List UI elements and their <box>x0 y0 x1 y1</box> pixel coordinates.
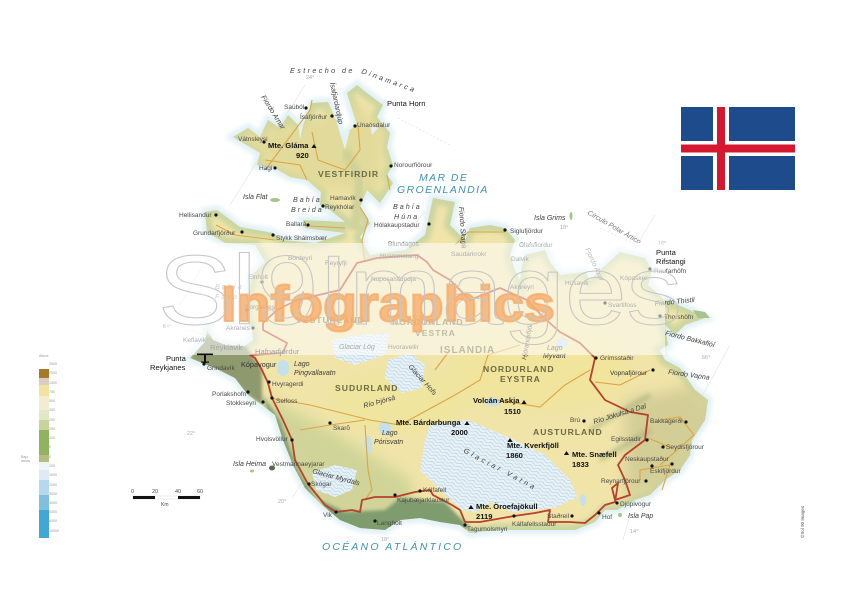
elevation legend: 200 <box>49 427 55 431</box>
place labels: Blundagos <box>388 241 419 248</box>
water and feature labels: Fiordo Arnar <box>259 94 286 131</box>
region labels: AUSTURLAND <box>533 427 603 437</box>
elevation legend: altura <box>21 459 30 463</box>
town dots <box>202 106 688 527</box>
place labels: Borgarnes <box>245 304 276 311</box>
elevation legend: 0 <box>49 455 51 459</box>
water and feature labels: Lago <box>547 345 563 352</box>
elevation legend: 1000 <box>49 473 57 477</box>
graticule degree labels <box>163 75 710 543</box>
mountain labels: 1860 <box>506 451 523 460</box>
scale bar <box>131 489 203 508</box>
place labels: Kálfafell <box>423 487 447 494</box>
place labels: Hof <box>602 514 612 521</box>
place labels: Brú <box>570 417 580 424</box>
place labels: Kópasker <box>620 275 648 282</box>
mountain labels: 2000 <box>451 428 468 437</box>
place labels: Norourfiörour <box>394 162 433 169</box>
place labels: Olafsfiordur <box>519 242 553 249</box>
airplane icon <box>197 354 213 363</box>
elevation legend <box>21 354 59 538</box>
region labels: NORDURLAND <box>483 364 555 374</box>
land base <box>190 85 708 533</box>
sea glow around the coast <box>190 85 708 533</box>
water and feature labels: Ísafjardardjúp <box>328 82 346 125</box>
graticule degree labels: 66° <box>702 355 710 361</box>
place labels: Skógar <box>311 481 332 488</box>
graticule degree labels: 64° <box>163 324 171 330</box>
coastal point labels: Punta <box>166 354 187 363</box>
mountain labels: 920 <box>296 151 309 160</box>
elevation legend: 2000 <box>49 371 57 375</box>
place labels: Hellisandur <box>179 212 212 219</box>
elevation legend: 200 <box>49 418 55 422</box>
place labels: Kópavogur <box>241 360 277 369</box>
place labels: Akureyri <box>510 284 534 291</box>
place labels: Unaósdalur <box>357 122 391 129</box>
coastal point labels: Punta Horn <box>387 99 425 108</box>
place labels: Stokkseyri <box>226 400 256 407</box>
elevation legend: 500 <box>49 399 55 403</box>
place labels: Nuposalsfundja <box>371 276 416 283</box>
watermark: outlined text: Sl9Images <box>158 235 682 345</box>
water and feature labels: Isla Grims <box>534 215 566 222</box>
water and feature labels: Glaciar Lög <box>339 344 375 351</box>
credit: ©Sol 90 Images <box>799 505 805 538</box>
water and feature labels: Isla Pap <box>628 513 653 520</box>
place labels: Thorshöfn <box>664 314 694 321</box>
place labels: Ísafjörður <box>300 112 328 121</box>
graticule degree labels: 24° <box>306 75 314 81</box>
water and feature labels: Glaciar Hofs <box>407 364 438 397</box>
elevation legend: 2500 <box>49 362 57 366</box>
place labels: Seydisfjörour <box>666 444 705 451</box>
place labels: Reyryfjl <box>325 260 347 267</box>
mountain labels: Volcán Askja <box>473 396 520 405</box>
elevation legend: 5000 <box>49 510 57 514</box>
glacier: Hofs <box>385 353 425 393</box>
Punta Rifstangi label: Punta <box>656 248 676 257</box>
water and feature labels: Pingvallavatn <box>294 370 336 377</box>
mountain labels: 2119 <box>476 512 492 521</box>
elevation legend: 4000 <box>49 501 57 505</box>
mountain labels <box>268 141 617 521</box>
elevation legend: 3000 <box>49 492 57 496</box>
water and feature labels: Faxa <box>215 292 239 301</box>
water and feature labels: MAR DE <box>419 172 468 184</box>
elevation legend: 300 <box>49 408 55 412</box>
place labels: Stykk Shálmsbær <box>276 235 328 242</box>
place labels: Tagurnolsmyri <box>467 526 507 533</box>
elevation legend: 200 <box>49 464 55 468</box>
mountain labels: 1833 <box>572 460 589 469</box>
place labels: Einholt <box>248 274 268 281</box>
lakes <box>277 301 586 506</box>
place labels: Bakkagerði <box>650 417 683 425</box>
place labels: Hvammstangi <box>380 253 420 260</box>
graticule degree labels: 20° <box>278 499 286 505</box>
place labels: Staðreil <box>547 512 570 520</box>
graticule degree labels: 18° <box>560 225 568 231</box>
elevation legend: Altura <box>39 354 48 358</box>
place labels: Reynarfjörour <box>601 478 641 485</box>
place labels: Porlakshofn <box>212 391 247 398</box>
graticule degree labels: 22° <box>187 431 195 437</box>
mountain labels: Mte. Bárdarbunga <box>396 418 461 427</box>
region labels: VESTFIRDIR <box>318 169 379 179</box>
water and feature labels: Bahía <box>215 282 244 291</box>
water and feature labels: Glaciar Vatna <box>462 446 539 492</box>
islands <box>250 198 710 517</box>
water and feature labels: Dinamarca <box>360 66 418 95</box>
water and feature labels: Fiordo Skaga <box>457 207 467 249</box>
place labels: Akranes <box>226 325 251 332</box>
place labels: Hafnarfjördur <box>255 347 300 356</box>
water and feature labels: Fiordo Bakkaflóí <box>665 330 716 349</box>
place labels: Hamavík <box>330 195 356 202</box>
region labels: NORDURLAND <box>392 317 464 327</box>
water and feature labels: OCÉANO ATLÁNTICO <box>322 540 463 553</box>
place labels: Eskifjördur <box>650 468 682 475</box>
place labels: Bordeyri <box>288 255 312 262</box>
place labels: Hvolsvöllur <box>256 436 289 443</box>
place labels: Djúpivogur <box>620 501 652 508</box>
mountain labels: Mte. Gláma <box>268 141 309 150</box>
graticule degree labels: 18° <box>381 537 389 543</box>
coastal point labels: Reykjanes <box>150 363 186 372</box>
water and feature labels: Isla Heima <box>233 461 266 468</box>
map: Iceland terrain <box>190 85 712 535</box>
elevation legend: 6000 <box>49 519 57 523</box>
terrain shading <box>190 85 712 535</box>
place labels: Grindavík <box>207 365 236 372</box>
place labels: Kajubæjarklaustur <box>397 497 450 504</box>
place labels <box>179 104 705 533</box>
place labels: Raufarhöfn <box>654 268 687 275</box>
water and feature labels: Glaciar Myrdals <box>311 468 361 488</box>
water and feature labels: Lago <box>294 361 310 368</box>
elevation legend: 10000 <box>49 529 59 533</box>
water and feature labels: Lago <box>382 430 398 437</box>
place labels: Keflavik <box>183 337 207 344</box>
place labels: Ballará <box>286 221 307 228</box>
place labels: Reykiavik <box>210 343 243 352</box>
region labels: VESTURLAND <box>296 315 365 325</box>
watermark band <box>165 243 665 355</box>
elevation legend: 750 <box>49 390 55 394</box>
water and feature labels: Fiordo Thistil <box>654 297 695 308</box>
place labels: Egilsstadir <box>611 436 642 443</box>
mountain labels: Mte. Snæfell <box>572 450 617 459</box>
place labels: Langholt <box>377 520 402 527</box>
place labels: Vopnafjörour <box>610 370 648 377</box>
water and feature labels: Bahía <box>293 195 322 204</box>
water and feature labels: GROENLANDIA <box>397 184 489 196</box>
mountain labels: 1510 <box>504 407 521 416</box>
rivers and secondary roads <box>216 100 694 500</box>
place labels: Saúból <box>284 104 305 111</box>
water and feature labels: Río Þjórsá <box>363 395 396 410</box>
water and feature labels <box>215 66 716 553</box>
place labels: Hvyragerdi <box>272 381 303 388</box>
elevation legend: 100 <box>49 436 55 440</box>
scale bar: 0 <box>131 489 134 495</box>
glacier: Drangajökull <box>370 125 378 135</box>
coastal point labels <box>150 99 425 372</box>
place labels: Hvoravellir <box>388 344 420 351</box>
place labels: Reykhólar <box>325 204 355 211</box>
place labels: Húsavík <box>565 280 589 287</box>
place labels: Siglufjördur <box>510 228 544 235</box>
water and feature labels: Río Jökulsá a Dal <box>593 403 647 426</box>
place labels: Saudárkrokr <box>451 251 487 258</box>
glacier: Vatna <box>420 420 577 512</box>
water and feature labels: Bahía <box>393 202 422 211</box>
water and feature labels: Breida <box>291 205 324 214</box>
place labels: Vestmannaeyjarar <box>272 461 325 468</box>
glacier: Myrdals <box>312 465 357 497</box>
place labels: Selfoss <box>276 398 298 405</box>
region labels: ISLANDIA <box>440 345 495 356</box>
water and feature labels: Fiordo Vapna <box>668 369 710 382</box>
place labels: Hagi <box>259 165 272 172</box>
scale bar: 40 <box>175 489 181 495</box>
place labels: Vik <box>323 512 333 519</box>
water and feature labels: Círculo Polar Ártico <box>586 208 643 246</box>
graticule lines <box>170 85 730 540</box>
region labels: VESTRA <box>415 328 456 338</box>
region labels: SUDURLAND <box>335 383 398 393</box>
water and feature labels: Hjörandsfijót <box>521 322 534 360</box>
flag of Iceland <box>681 107 795 190</box>
place labels: Vátnsleysi <box>238 136 268 143</box>
glacier: Lög <box>332 333 390 365</box>
scale bar: 60 <box>197 489 203 495</box>
mountain labels: Mte. Kverkfjöll <box>507 441 559 450</box>
mountain labels: Mte. Öroefajökull <box>476 502 538 511</box>
water and feature labels: Húna <box>394 212 419 221</box>
water and feature labels: Fiordo Axar <box>583 247 605 283</box>
graticule degree labels: 14° <box>630 529 638 535</box>
scale bar: 20 <box>152 489 158 495</box>
water and feature labels: Pórisvatn <box>374 439 403 446</box>
place labels: Skarõ <box>333 425 350 432</box>
place labels: Kálfafellsstadur <box>512 521 557 528</box>
place labels: Neskaupstaður <box>625 455 670 463</box>
scale bar: Km <box>161 502 168 508</box>
place labels: Hólakaupstadur <box>374 222 420 229</box>
Punta Rifstangi label: Rifstangi <box>656 257 686 266</box>
elevation legend: 0 <box>49 445 51 449</box>
place labels: Dalvik <box>511 256 529 263</box>
elevation legend: Bajo <box>21 455 28 459</box>
region labels <box>296 169 603 437</box>
graticule degree labels: 16° <box>658 241 666 247</box>
watermark: orange text: Infographics <box>221 276 555 332</box>
place labels: Grímsstaðir <box>600 354 634 362</box>
place labels: Svartifoss <box>608 302 637 309</box>
place labels: Grundarfjörður <box>193 229 236 237</box>
ring road <box>250 255 648 523</box>
elevation legend: 2000 <box>49 483 57 487</box>
water and feature labels: Myvant <box>543 353 567 360</box>
water and feature labels: Estrecho de <box>290 66 355 75</box>
water and feature labels: Isla Flat <box>243 194 269 201</box>
elevation legend: 1500 <box>49 381 57 385</box>
region labels: EYSTRA <box>500 374 541 384</box>
